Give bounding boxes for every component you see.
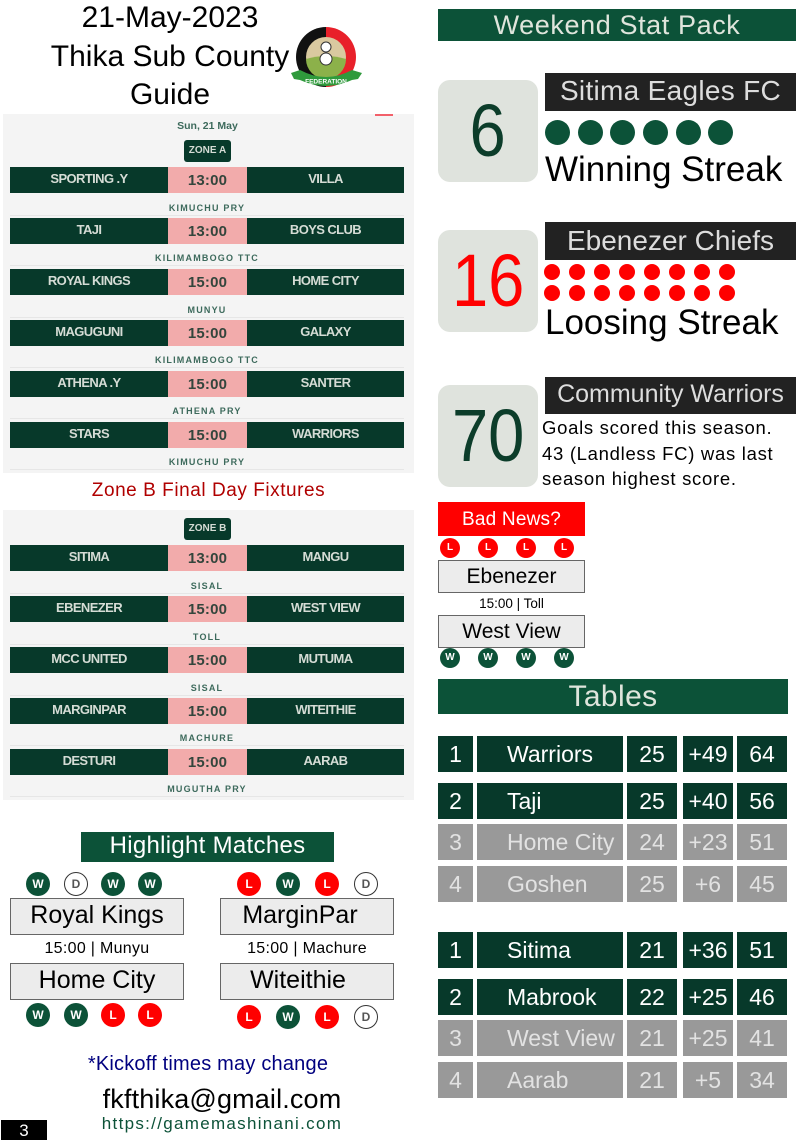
- team bar: Community Warriors: [545, 377, 796, 414]
- form: Royal Kings: [26, 872, 162, 896]
- fixture row: BOYS CLUB: [290, 222, 361, 237]
- fixture row: MANGU: [302, 549, 349, 564]
- form: Home City: L: [146, 1008, 154, 1022]
- form: West View: W: [483, 652, 493, 663]
- table row 3: 51: [749, 829, 775, 855]
- heading: tables: Tables: [568, 680, 658, 713]
- zone A badge: [184, 140, 231, 162]
- table row 1: Warriors: [507, 741, 593, 767]
- table row 4: +5: [695, 1067, 721, 1093]
- fixture row: AARAB: [304, 753, 347, 768]
- table row 1: Sitima: [507, 937, 571, 963]
- venue: [10, 783, 404, 797]
- title: Thika Sub County: [51, 40, 289, 72]
- venue: KILIMAMBOGO TTC: [155, 355, 259, 365]
- venue: TOLL: [193, 632, 221, 642]
- form: West View: W: [445, 652, 455, 663]
- fixture row: DESTURI: [63, 753, 115, 768]
- venue: KIMUCHU PRY: [169, 457, 245, 467]
- team: MarginPar: MarginPar: [242, 901, 358, 929]
- table row 4: 34: [749, 1067, 775, 1093]
- table row 2: [438, 783, 787, 819]
- goals description: season highest score.: [542, 468, 737, 489]
- form: Ebenezer: L: [523, 542, 529, 553]
- form: Witeithie: [237, 1005, 378, 1029]
- zone B badge: [184, 518, 231, 540]
- venue: [10, 304, 404, 318]
- venue: [10, 252, 404, 266]
- fixture row: MARGINPAR: [52, 702, 126, 717]
- fixture row: [10, 545, 404, 571]
- fixture row: [10, 422, 404, 448]
- heading: highlight matches: Highlight Matches: [110, 832, 305, 859]
- venue: MUGUTHA PRY: [167, 784, 247, 794]
- fixture row: [10, 269, 404, 295]
- form: Witeithie: L: [323, 1010, 331, 1024]
- fixture row: MCC UNITED: [51, 651, 127, 666]
- fixture row: TAJI: [77, 222, 101, 237]
- venue: ATHENA PRY: [172, 406, 242, 416]
- label: winning streak: Winning Streak: [545, 150, 782, 189]
- fixture row: [10, 320, 404, 346]
- fixture row: 15:00: [188, 376, 227, 393]
- fixture row: 13:00: [188, 550, 227, 567]
- table row 3: +23: [688, 829, 728, 855]
- title: [51, 1, 290, 111]
- goals description: Goals scored this season.: [542, 417, 772, 438]
- table row 3: 3: [449, 1025, 462, 1051]
- fixture row: STARS: [69, 426, 109, 441]
- team bar: Ebenezer Chiefs: [545, 222, 796, 260]
- fixture row: SPORTING .Y: [50, 171, 128, 186]
- table row 1: [438, 932, 787, 968]
- table row 3: Home City: [507, 829, 614, 855]
- venue: [10, 405, 404, 419]
- table row 4: 4: [449, 871, 462, 897]
- fixture row: 15:00: [188, 652, 227, 669]
- team: Ebenezer: [438, 560, 585, 593]
- fixture row: MAGUGUNI: [55, 324, 123, 339]
- form: Home City: W: [70, 1008, 82, 1022]
- table row 4: [438, 1062, 787, 1098]
- table row 1: +49: [688, 741, 728, 767]
- form: Home City: W: [32, 1008, 44, 1022]
- team: Royal Kings: [10, 898, 184, 935]
- fixture row: [10, 218, 404, 244]
- fixture row: [10, 749, 404, 775]
- fixture row: 13:00: [188, 223, 227, 240]
- title: 21-May-2023: [82, 1, 258, 34]
- table row 2: 25: [639, 788, 665, 814]
- venue: [10, 456, 404, 470]
- fixture row: 15:00: [188, 754, 227, 771]
- fixture row: GALAXY: [300, 324, 351, 339]
- match info: 15:00 | Munyu: [44, 940, 150, 957]
- team: Witeithie: Witeithie: [250, 966, 346, 994]
- venue: [10, 354, 404, 368]
- form: West View: W: [521, 652, 531, 663]
- table row 1: 25: [639, 741, 665, 767]
- stat: losing streak: [438, 230, 538, 332]
- table row 1: 21: [639, 937, 665, 963]
- table row 3: +25: [688, 1025, 728, 1051]
- zone B badge: ZONE B: [189, 523, 226, 534]
- page number: [1, 1120, 47, 1140]
- fixture row: 15:00: [188, 601, 227, 618]
- table row 4: Aarab: [507, 1067, 568, 1093]
- losing streak dots: [544, 264, 735, 301]
- table row 3: 24: [639, 829, 665, 855]
- fixture row: 15:00: [188, 274, 227, 291]
- form: West View: [440, 648, 574, 668]
- stat: winning streak: [438, 80, 538, 182]
- fixture row: WEST VIEW: [291, 600, 360, 615]
- venue: [10, 732, 404, 746]
- team: Ebenezer: Ebenezer: [467, 565, 556, 588]
- form: Home City: [26, 1003, 162, 1027]
- goals description: 43 (Landless FC) was last: [542, 442, 773, 464]
- venue: SISAL: [191, 683, 223, 693]
- form: Royal Kings: W: [107, 877, 119, 891]
- heading: weekend stat pack: [438, 9, 796, 41]
- fixture row: [10, 371, 404, 397]
- team bar: Community Warriors: Community Warriors: [557, 380, 784, 408]
- page number: 3: [19, 1121, 29, 1140]
- fixture row: ATHENA .Y: [57, 375, 121, 390]
- venue: KILIMAMBOGO TTC: [155, 253, 259, 263]
- fixture row: [10, 647, 404, 673]
- icon: football federation logo: FEDERATION: [305, 78, 347, 86]
- panel: zone A fixtures: [3, 114, 414, 473]
- table row 3: [438, 1020, 787, 1056]
- table row 1: 1: [449, 741, 462, 767]
- table row 3: West View: [507, 1025, 615, 1051]
- table row 1: 64: [749, 741, 775, 767]
- form: West View: W: [559, 652, 569, 663]
- table row 3: 3: [449, 829, 462, 855]
- match info: 15:00 | Machure: [247, 940, 367, 957]
- panel: zone B fixtures: [3, 510, 414, 800]
- table row 2: Mabrook: [507, 984, 596, 1010]
- contact email: fkfthika@gmail.com: [103, 1084, 341, 1114]
- panel: bad news header: Bad News?: [462, 509, 561, 530]
- form: MarginPar: D: [362, 877, 370, 891]
- icon: football federation logo: [291, 27, 362, 87]
- fixture row: 13:00: [188, 172, 227, 189]
- table row 3: 21: [639, 1025, 665, 1051]
- form: MarginPar: L: [245, 877, 253, 891]
- table: zone A: [438, 736, 787, 902]
- fixture row: 15:00: [188, 325, 227, 342]
- venue: [10, 580, 404, 594]
- venue: MUNYU: [188, 305, 226, 315]
- fixture row: HOME CITY: [292, 273, 359, 288]
- venue: [10, 682, 404, 696]
- venue: [10, 202, 404, 216]
- fixture row: SITIMA: [69, 549, 109, 564]
- form: Witeithie: D: [362, 1010, 370, 1024]
- label: losing streak: Loosing Streak: [545, 303, 778, 342]
- form: Witeithie: L: [245, 1010, 253, 1024]
- form: Royal Kings: W: [144, 877, 156, 891]
- table: zone B: [438, 932, 787, 1098]
- streak dots: [545, 120, 733, 145]
- venue: [10, 631, 404, 645]
- team: Home City: [10, 963, 184, 1000]
- zone A badge: ZONE A: [189, 145, 226, 156]
- table row 4: 45: [749, 871, 775, 897]
- venue: MACHURE: [180, 733, 234, 743]
- table row 1: 51: [749, 937, 775, 963]
- form: Ebenezer: L: [485, 542, 491, 553]
- fixture row: [10, 596, 404, 622]
- note: kickoff times: *Kickoff times may change: [88, 1053, 328, 1075]
- form: MarginPar: W: [282, 877, 294, 891]
- table row 4: +6: [695, 871, 721, 897]
- table row 2: [438, 979, 787, 1015]
- table row 1: [438, 736, 787, 772]
- heading: highlight matches: [81, 832, 334, 862]
- fixture row: EBENEZER: [56, 600, 122, 615]
- fixture row: 15:00: [188, 703, 227, 720]
- team: Home City: Home City: [39, 966, 155, 994]
- stat: goals: 70: [452, 394, 524, 477]
- team: West View: [438, 615, 585, 648]
- form: Ebenezer: [440, 538, 574, 558]
- table row 4: 25: [639, 871, 665, 897]
- table row 2: Taji: [507, 788, 542, 814]
- table row 2: +25: [688, 984, 728, 1010]
- form: MarginPar: [237, 872, 378, 896]
- team bar: Sitima Eagles: Sitima Eagles FC: [560, 75, 781, 106]
- match info: 15:00 | Toll: [479, 596, 544, 611]
- website: https://gamemashinani.com: [102, 1114, 342, 1133]
- table row 2: 56: [749, 788, 775, 814]
- stat: losing streak: 16: [452, 239, 524, 322]
- fixture row: SANTER: [301, 375, 350, 390]
- fixture row: VILLA: [308, 171, 343, 186]
- title: Guide: [130, 78, 210, 111]
- team: Royal Kings: Royal Kings: [30, 901, 164, 929]
- fixture row: 15:00: [188, 427, 227, 444]
- form: Royal Kings: W: [32, 877, 44, 891]
- table row 3: [438, 824, 787, 860]
- table row 4: 4: [449, 1067, 462, 1093]
- table row 1: +36: [688, 937, 728, 963]
- team: West View: West View: [462, 620, 561, 643]
- venue: KIMUCHU PRY: [169, 203, 245, 213]
- heading: weekend stat pack: Weekend Stat Pack: [494, 10, 740, 40]
- fixture row: [10, 698, 404, 724]
- table row 4: Goshen: [507, 871, 588, 897]
- fixture row: WITEITHIE: [295, 702, 356, 717]
- fixture date: Sun, 21 May: [177, 120, 238, 132]
- table row 1: 1: [449, 937, 462, 963]
- form: Royal Kings: D: [72, 877, 80, 891]
- fixture row: ROYAL KINGS: [48, 273, 130, 288]
- panel: bad news header: [438, 502, 585, 536]
- fixture row: [10, 167, 404, 193]
- stat: goals: [438, 385, 538, 487]
- stat: winning streak: 6: [470, 89, 506, 172]
- table row 2: 46: [749, 984, 775, 1010]
- table row 3: 41: [749, 1025, 775, 1051]
- form: Ebenezer: L: [447, 542, 453, 553]
- goals description: [542, 417, 773, 489]
- table row 2: 22: [639, 984, 665, 1010]
- heading: zone B: Zone B Final Day Fixtures: [92, 480, 325, 501]
- fixture row: WARRIORS: [292, 426, 359, 441]
- team: Witeithie: [220, 963, 394, 1000]
- form: MarginPar: L: [323, 877, 331, 891]
- form: Ebenezer: L: [561, 542, 567, 553]
- form: Witeithie: W: [282, 1010, 294, 1024]
- table row 2: 2: [449, 984, 462, 1010]
- team: MarginPar: [220, 898, 394, 935]
- heading: tables: [438, 679, 788, 714]
- table row 4: [438, 866, 787, 902]
- table row 2: +40: [688, 788, 728, 814]
- fixture row: MUTUMA: [298, 651, 353, 666]
- red tab: [375, 114, 393, 116]
- team bar: Ebenezer Chiefs: Ebenezer Chiefs: [567, 225, 774, 256]
- form: Home City: L: [109, 1008, 117, 1022]
- venue: SISAL: [191, 581, 223, 591]
- table row 2: 2: [449, 788, 462, 814]
- table row 4: 21: [639, 1067, 665, 1093]
